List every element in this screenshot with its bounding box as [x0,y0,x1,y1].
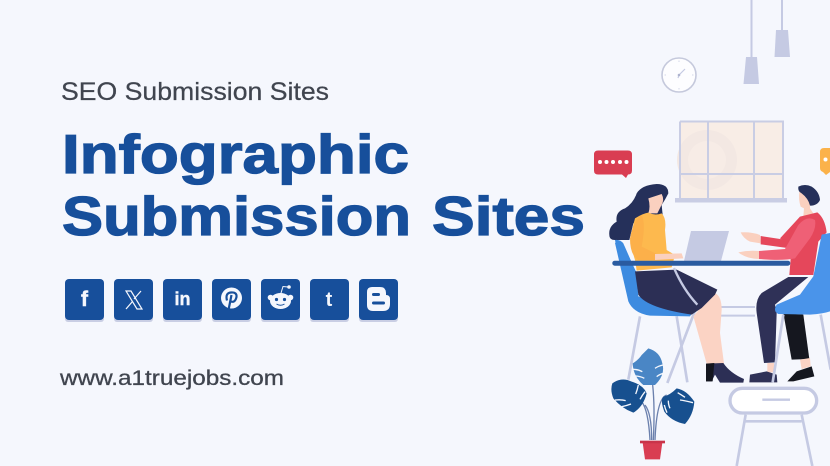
woman: upper body [609,184,683,280]
icon: X [114,279,153,322]
subtitle: SEO Submission Sites [61,78,329,106]
social icons row [65,279,398,322]
speech bubble orange [820,148,830,175]
website url: www.a1truejobs.com [59,367,284,390]
icon: blogger [359,279,398,322]
icon: tumblr [310,279,349,322]
man's chair [773,233,830,382]
front stool [730,388,817,466]
icon: pinterest [212,279,251,322]
icon: linkedin [163,279,202,322]
man: legs [749,277,814,382]
title [62,123,585,247]
icon: facebook [65,279,104,322]
woman's chair [615,241,755,383]
title: Infographic [62,123,409,185]
woman [609,184,744,383]
man: upper body [738,185,827,275]
man [738,185,827,382]
icon: linkedin: in [174,289,190,309]
speech bubble red [594,150,632,178]
woman: lower body [635,268,744,383]
potted plant [611,348,694,459]
window [675,122,787,202]
laptop [684,231,729,261]
wall clock [662,58,696,92]
title: Submission [62,185,411,247]
icon: reddit [261,279,300,322]
title: Sites [432,185,585,247]
table top [612,261,790,266]
icon: tumblr: t [326,289,333,311]
icon: facebook: f [81,288,89,311]
illustration: office scene [594,0,830,466]
hanging lamps [744,0,790,84]
